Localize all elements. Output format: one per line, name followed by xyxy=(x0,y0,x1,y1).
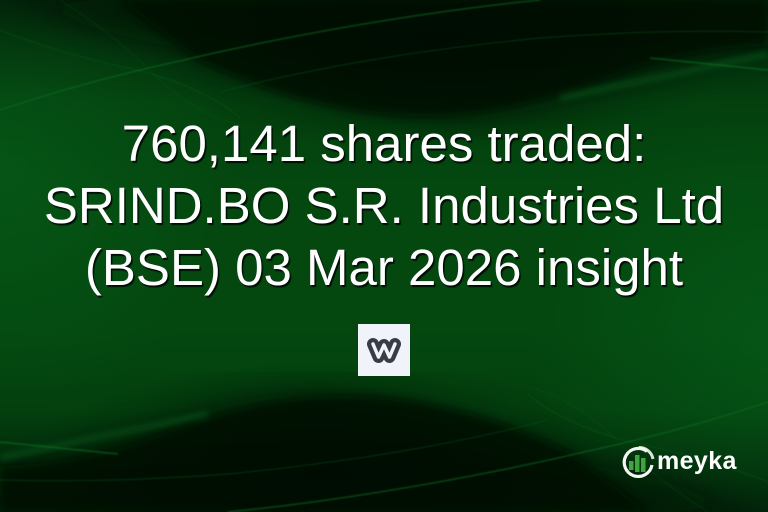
logo: meyka brand icon xyxy=(622,446,654,478)
icon: Weebly W logo xyxy=(358,324,410,376)
title xyxy=(44,115,724,298)
title: 760,141 shares traded: xyxy=(122,115,646,172)
title: SRIND.BO S.R. Industries Ltd xyxy=(44,177,724,234)
title: (BSE) 03 Mar 2026 insight xyxy=(85,239,683,296)
logo wordmark: meyka: meyka xyxy=(657,447,737,475)
